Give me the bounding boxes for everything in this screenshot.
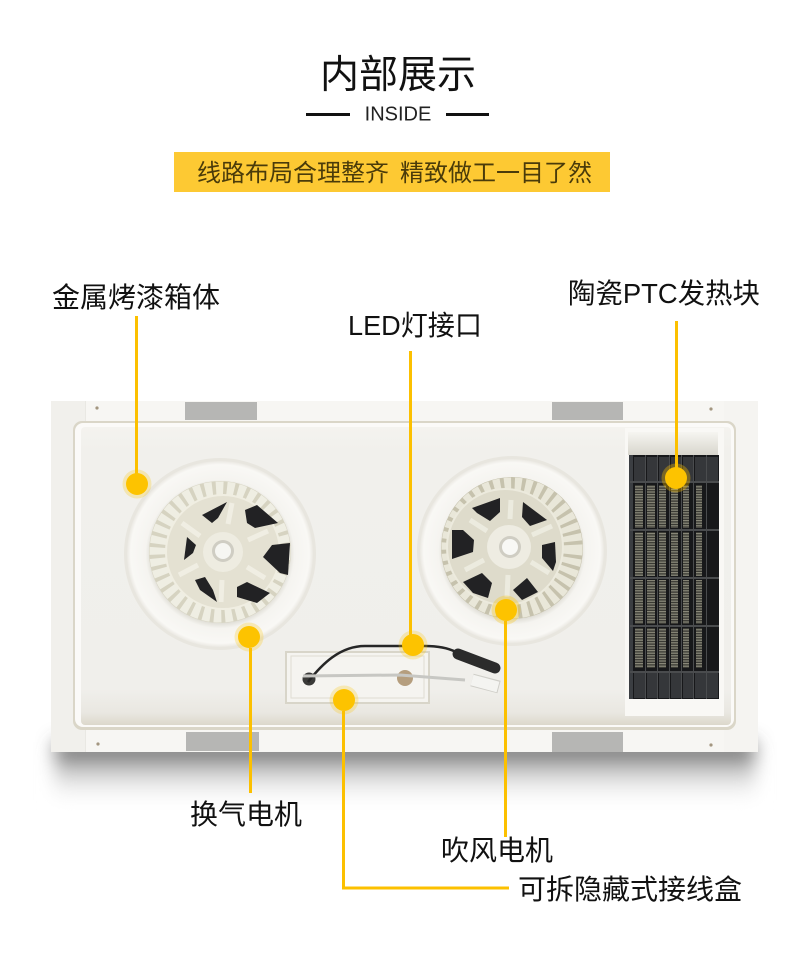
- metal clips: [185, 402, 623, 752]
- callout: 金属烤漆箱体: [52, 282, 220, 498]
- outer frame: [51, 401, 758, 752]
- inner panel: [73, 421, 736, 730]
- product: heater unit interior: [51, 401, 758, 800]
- shadow under unit: [55, 742, 755, 800]
- banner: 精致做工一目了然: [400, 160, 592, 187]
- callout: 吹风电机: [441, 596, 553, 866]
- right fan: [417, 456, 607, 646]
- callout: 陶瓷PTC发热块: [568, 278, 760, 492]
- title: 内部展示: [320, 54, 476, 97]
- callout: 可拆隐藏式接线盒: [330, 686, 742, 905]
- callout: 金属烤漆箱体: 金属烤漆箱体: [52, 282, 220, 313]
- subtitle: INSIDE with rules: [306, 104, 489, 126]
- banner: 线路布局合理整齐: [197, 160, 389, 187]
- callout: 可拆隐藏式接线盒: 可拆隐藏式接线盒: [518, 874, 742, 905]
- callout: 换气电机: [190, 622, 302, 830]
- callout: LED灯接口: LED灯接口: [348, 310, 482, 341]
- callout: 换气电机: 换气电机: [190, 799, 302, 830]
- banner: [174, 152, 610, 192]
- callout: LED灯接口: [348, 310, 482, 660]
- PTC heater grille: [625, 428, 724, 716]
- callout: 吹风电机: 吹风电机: [441, 835, 553, 866]
- callout: 陶瓷PTC发热块: 陶瓷PTC发热块: [568, 278, 760, 309]
- left fan: [124, 458, 316, 650]
- junction box with wires: [285, 646, 499, 704]
- screw holes: [95, 406, 713, 747]
- subtitle: INSIDE with rules: INSIDE: [365, 104, 431, 126]
